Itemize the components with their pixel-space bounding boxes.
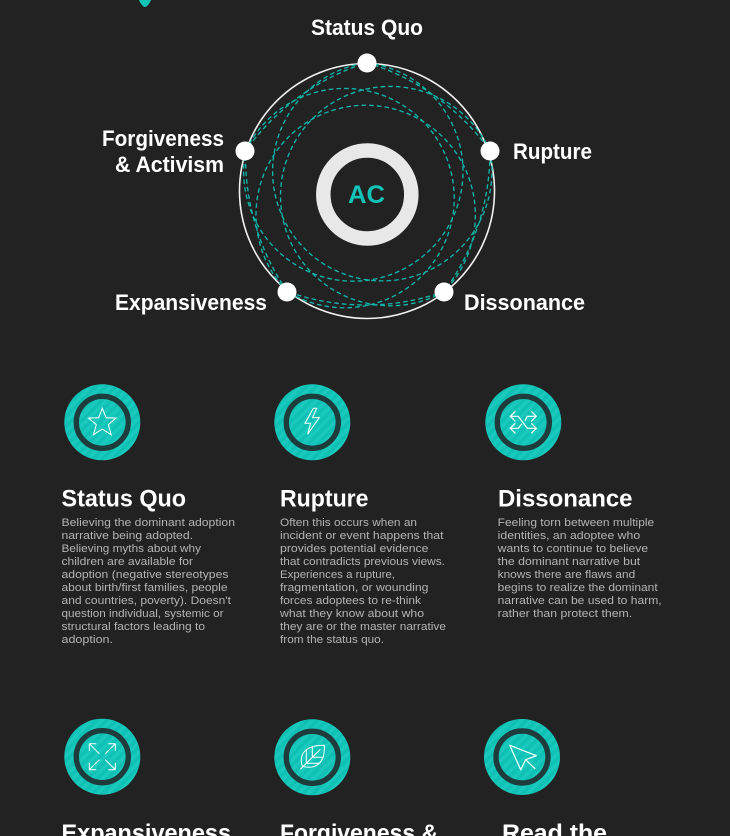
body text: wants to continue to believe xyxy=(497,543,648,555)
icon: expand arrows xyxy=(64,719,140,795)
icon: star xyxy=(64,384,140,460)
body text: adoption (negative stereotypes xyxy=(62,569,229,581)
panel: forgiveness and activism xyxy=(274,719,438,836)
body text: knows there are flaws and xyxy=(498,569,635,581)
body text xyxy=(497,517,662,620)
body text: that contradicts previous views. xyxy=(280,556,445,568)
body text: incident or event happens that xyxy=(280,530,444,542)
panel: rupture xyxy=(274,384,446,646)
heading: Dissonance xyxy=(498,486,632,512)
outer ring xyxy=(240,64,494,318)
body text xyxy=(62,517,235,646)
top teal pin fragment xyxy=(139,0,151,7)
body text: rather than protect them. xyxy=(498,608,632,620)
body text: adoption. xyxy=(62,634,113,646)
heading: Rupture xyxy=(280,486,368,512)
panel: read the xyxy=(484,719,607,836)
body text: fragmentation, or wounding xyxy=(280,582,428,594)
diagram labels: & Activism xyxy=(115,152,224,177)
body text: Believing myths about why xyxy=(62,543,201,555)
icon: cursor arrow xyxy=(484,719,560,795)
body text: children are available for xyxy=(62,556,193,568)
panel: dissonance xyxy=(485,384,662,620)
body text xyxy=(279,517,446,646)
body text: and countries, poverty). Doesn't xyxy=(62,595,232,607)
panel: expansiveness xyxy=(62,719,231,836)
heading: Status Quo xyxy=(62,486,186,512)
body text: narrative being adopted. xyxy=(62,530,193,542)
body text: question individual, systemic or xyxy=(62,608,224,620)
icon: lightning bolt xyxy=(274,384,350,460)
icon: leaf xyxy=(274,719,350,795)
body text: Feeling torn between multiple xyxy=(498,517,654,529)
cycle diagram xyxy=(236,54,500,318)
body text: they are or the master narrative xyxy=(280,621,446,633)
body text: structural factors leading to xyxy=(62,621,205,633)
body text: about birth/first families, people xyxy=(62,582,228,594)
icon: crossing arrows xyxy=(485,384,561,460)
body text: begins to realize the dominant xyxy=(498,582,659,594)
body text: Often this occurs when an xyxy=(280,517,417,529)
center label: AC xyxy=(348,181,385,209)
diagram labels: Status Quo xyxy=(311,15,423,40)
dashed orbit paths xyxy=(244,63,492,308)
body text: forces adoptees to re-think xyxy=(280,595,421,607)
body text: Experiences a rupture, xyxy=(280,569,395,581)
diagram labels: Forgiveness xyxy=(102,126,224,151)
body text: Believing the dominant adoption xyxy=(62,517,235,529)
diagram labels: Dissonance xyxy=(464,290,585,315)
center ring xyxy=(323,150,411,238)
panel: status quo xyxy=(62,384,235,646)
body text: from the status quo. xyxy=(280,634,384,646)
diagram labels xyxy=(102,15,592,315)
diagram labels: Expansiveness xyxy=(115,290,267,315)
body text: the dominant narrative but xyxy=(498,556,641,568)
body text: identities, an adoptee who xyxy=(498,530,640,542)
body text: provides potential evidence xyxy=(280,543,428,555)
body text: narrative can be used to harm, xyxy=(498,595,662,607)
diagram labels: Rupture xyxy=(513,139,592,164)
stage dots xyxy=(236,54,500,302)
body text: what they know about who xyxy=(279,608,424,620)
